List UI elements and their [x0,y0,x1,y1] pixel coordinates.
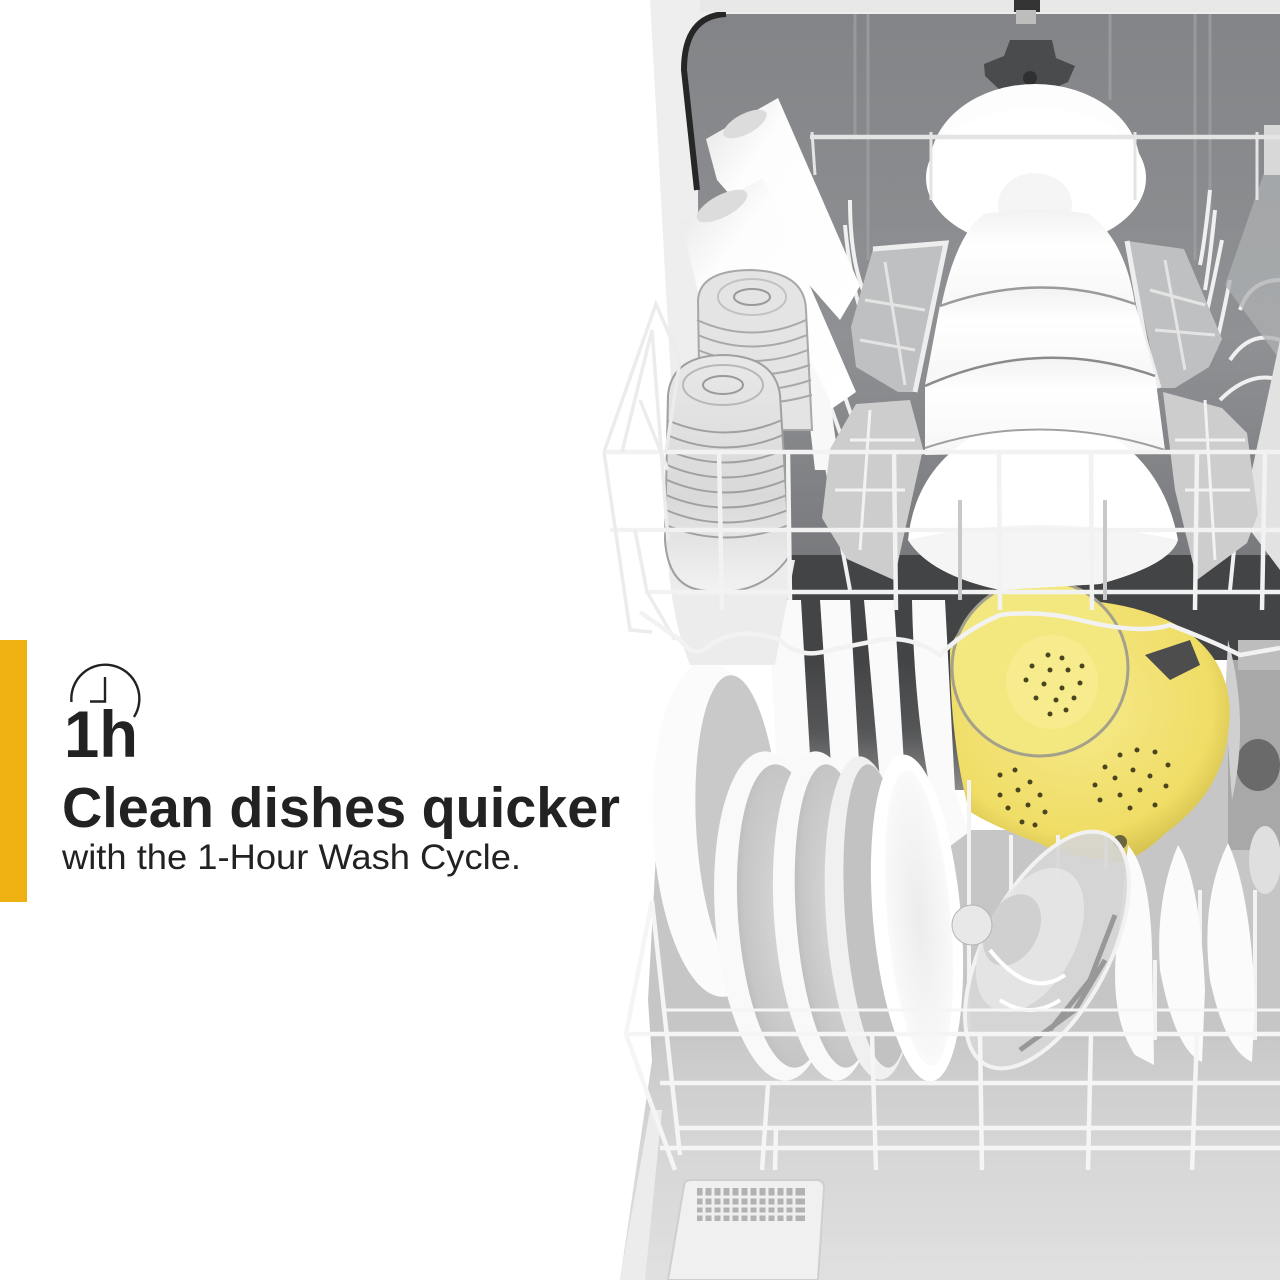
lower back wall [790,660,980,790]
back plates [768,600,969,850]
dinner plate 2 [763,748,889,1084]
dinner plate 3 [815,753,925,1083]
vent [668,1180,824,1280]
door gasket [684,14,726,190]
wall ribs [855,14,1210,260]
lid knob [952,905,992,945]
colander handle [1145,640,1200,680]
door frame [650,0,1280,400]
dinner plate 4 [859,751,975,1085]
dishwasher interior [620,0,1280,1280]
bottle right [1225,125,1280,570]
small plates [1115,843,1255,1065]
bowl 2 [925,287,1155,385]
top frame lip [700,0,1280,12]
colander rim [952,580,1128,756]
glass dish lower left [822,400,923,580]
rack tines back [810,190,1280,590]
rack tines [969,780,1255,1040]
stacked cups back [697,270,812,430]
glass dish upper left [851,243,946,392]
glass dish upper right [1127,241,1222,388]
lower rack dishes [644,580,1280,1094]
lower tub [648,730,1280,1180]
bowl stack [908,210,1178,590]
glass lid [931,806,1163,1094]
back plate stack [926,84,1146,248]
glass dish lower right [1163,392,1258,580]
colander foot [1113,835,1127,849]
right side utensils [1225,640,1280,894]
lower rack [626,901,1280,1170]
tall glass 2 [681,178,856,410]
icon: one hour clock: 1h [64,697,138,771]
bowl 1 [940,210,1135,312]
bowl 3 [925,357,1165,455]
accent bar [0,640,27,902]
dark gap between racks [790,555,1280,660]
floor edge [620,1110,662,1280]
tub back wall [685,14,1280,660]
large bowl [908,428,1178,590]
upper rack dishes [665,84,1280,665]
heading: Clean dishes quicker [62,776,620,840]
serving bowl [644,658,788,1000]
spray arm mount [984,0,1075,90]
subheading: with the 1-Hour Wash Cycle. [61,838,521,877]
colander holes [998,652,1170,828]
stacked cups front [665,355,790,592]
colander base [1006,635,1098,729]
tall glass 1 [706,98,860,320]
colander [950,580,1230,862]
glass bottom below cups [668,560,795,665]
dinner plate 1 [704,747,846,1085]
door inner floor [620,1040,1280,1280]
icon: one hour clock [64,665,139,771]
upper rack [604,132,1280,655]
white glass end behind rack [800,340,840,470]
